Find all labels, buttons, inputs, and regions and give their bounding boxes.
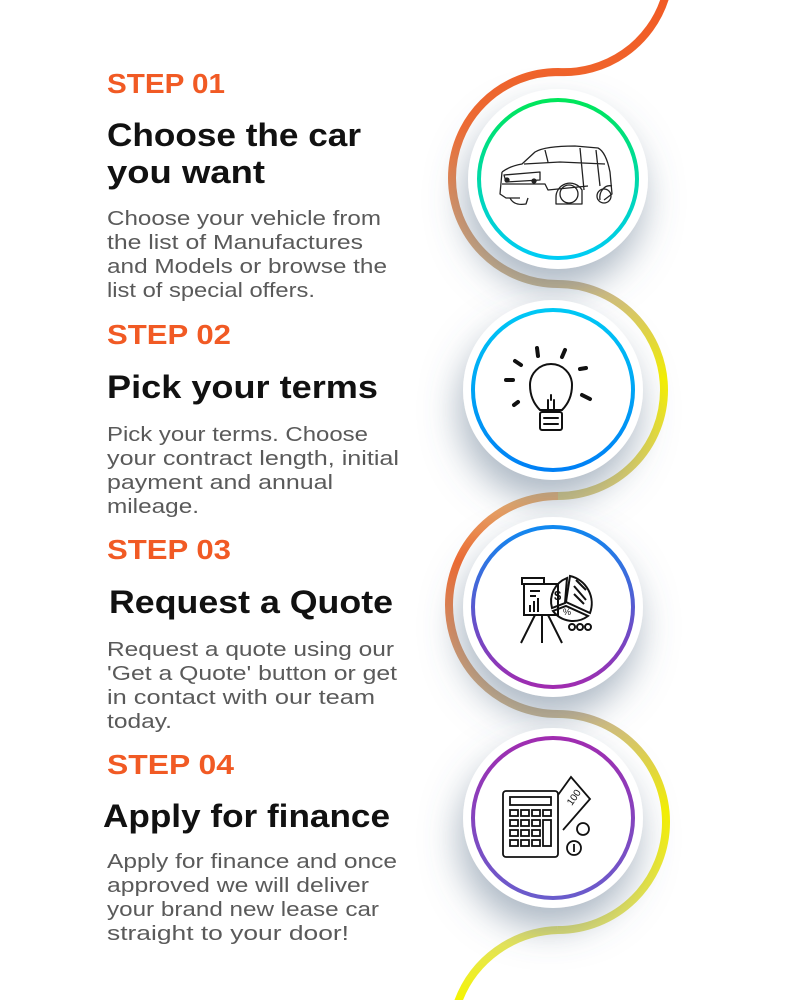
- step 01: Choose your vehicle from: [107, 208, 381, 230]
- step 03: STEP 03: [107, 534, 231, 565]
- step 04: Apply for finance: [103, 798, 390, 834]
- step 04: your brand new lease car: [107, 899, 379, 921]
- step 02: mileage.: [107, 496, 199, 518]
- step 01: you want: [107, 154, 265, 190]
- step 01: [107, 68, 387, 302]
- step 01: and Models or browse the: [107, 256, 387, 278]
- icon circle 1: car: [468, 89, 648, 269]
- step 03: Request a Quote: [109, 584, 393, 620]
- step 03: today.: [107, 711, 172, 733]
- step 03: in contact with our team: [107, 687, 375, 709]
- icon circle 3: chart easel: $: [554, 588, 562, 603]
- icon circle 4: calculator: [463, 728, 643, 908]
- step 04: [103, 749, 397, 945]
- icon circle 3: chart easel: [463, 517, 643, 697]
- step 03: Request a quote using our: [107, 639, 394, 661]
- step 04: straight to your door!: [107, 923, 349, 945]
- step 02: Pick your terms: [107, 369, 378, 405]
- step 01: the list of Manufactures: [107, 232, 363, 254]
- icon circle 2: light bulb: [463, 300, 643, 480]
- icon circle 4: calculator: 100: [565, 788, 584, 808]
- step 01: list of special offers.: [107, 280, 315, 302]
- step 04: approved we will deliver: [107, 875, 369, 897]
- step 04: STEP 04: [107, 749, 234, 780]
- step 01: STEP 01: [107, 68, 225, 99]
- step 04: Apply for finance and once: [107, 851, 397, 873]
- step 02: [107, 319, 399, 518]
- step 03: 'Get a Quote' button or get: [107, 663, 398, 685]
- step 02: Pick your terms. Choose: [107, 424, 368, 446]
- step 01: Choose the car: [107, 117, 361, 153]
- step 02: STEP 02: [107, 319, 231, 350]
- wavy path: [449, 0, 666, 1000]
- step 02: payment and annual: [107, 472, 333, 494]
- icon circle 3: chart easel: %: [563, 607, 571, 617]
- step 02: your contract length, initial: [107, 448, 399, 470]
- step 03: [107, 534, 398, 733]
